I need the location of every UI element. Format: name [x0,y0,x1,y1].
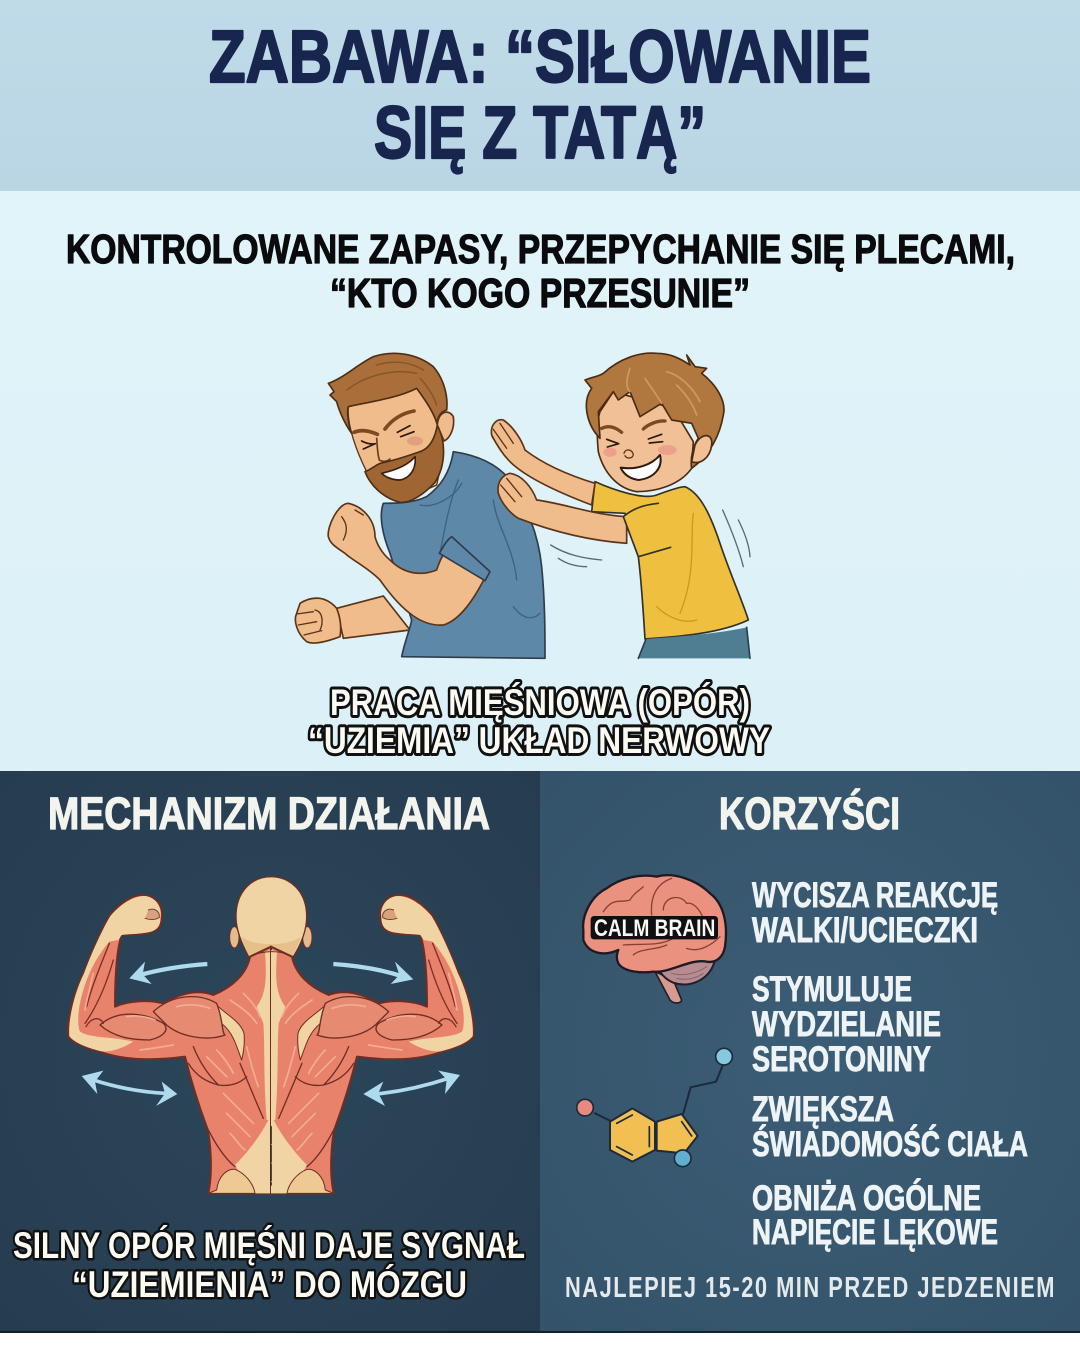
caption: muscle signal: SILNY OPÓR MIĘŚNI DAJE SYGNAŁ [13,1224,525,1266]
arrow: up right [333,962,413,984]
benefits list: NAPIĘCIE LĘKOWE [752,1213,998,1252]
arrow: up left [129,962,207,984]
panel: benefits [540,771,1080,1332]
icon: serotonin molecule [577,1048,732,1167]
panel: illustration area [0,191,1080,771]
subtitle [66,226,1015,316]
father shirt [381,452,545,658]
boy shirt [592,482,748,639]
boy head [585,353,724,492]
heading: benefits: KORZYŚCI [719,788,900,839]
benefits list: STYMULUJE [752,970,912,1009]
boy sleeve [623,498,671,557]
father front arm [328,503,484,625]
father back fist [295,598,341,643]
icon: calm brain [583,875,726,1003]
muscle figure [68,895,474,1193]
title [209,15,871,174]
caption: muscle signal [13,1224,525,1305]
brain label: CALM BRAIN [594,915,715,942]
benefits list: WYCISZA REAKCJĘ [752,876,998,915]
benefits list: WALKI/UCIECZKI [752,911,978,950]
father back arm [337,596,410,638]
caption: muscle signal: “UZIEMIENIA” DO MÓZGU [72,1263,467,1305]
arrow: lower left [82,1071,177,1106]
subtitle: “KTO KOGO PRZESUNIE” [330,270,750,316]
heading: mechanism: MECHANIZM DZIAŁANIA [48,788,490,839]
caption: muscle work: PRACA MIĘŚNIOWA (OPÓR) [330,681,750,723]
motion lines [551,510,750,567]
caption: muscle work: “UZIEMIA” UKŁAD NERWOWY [308,720,770,761]
panel bottom edge [0,1331,1080,1333]
benefits list: ZWIĘKSZA [752,1090,894,1129]
caption: muscle work [308,681,770,761]
head [230,877,312,957]
benefits list [752,876,1028,1252]
illustration: back muscles [68,877,474,1193]
panel: mechanism [0,771,540,1332]
boy lower arm and hand [498,473,627,543]
arrow: lower right [363,1071,460,1106]
title: SIĘ Z TATĄ” [374,91,706,174]
panel: title band [0,0,1080,191]
boy upper arm and hand [491,420,595,505]
benefits list: SEROTONINY [752,1040,931,1079]
benefits list: WYDZIELANIE [752,1005,941,1044]
title: ZABAWA: “SIŁOWANIE [209,15,871,98]
illustration: father and son pushing [295,353,750,658]
benefits list: OBNIŻA OGÓLNE [752,1178,981,1218]
father head [328,353,454,502]
boy pants [638,627,750,658]
